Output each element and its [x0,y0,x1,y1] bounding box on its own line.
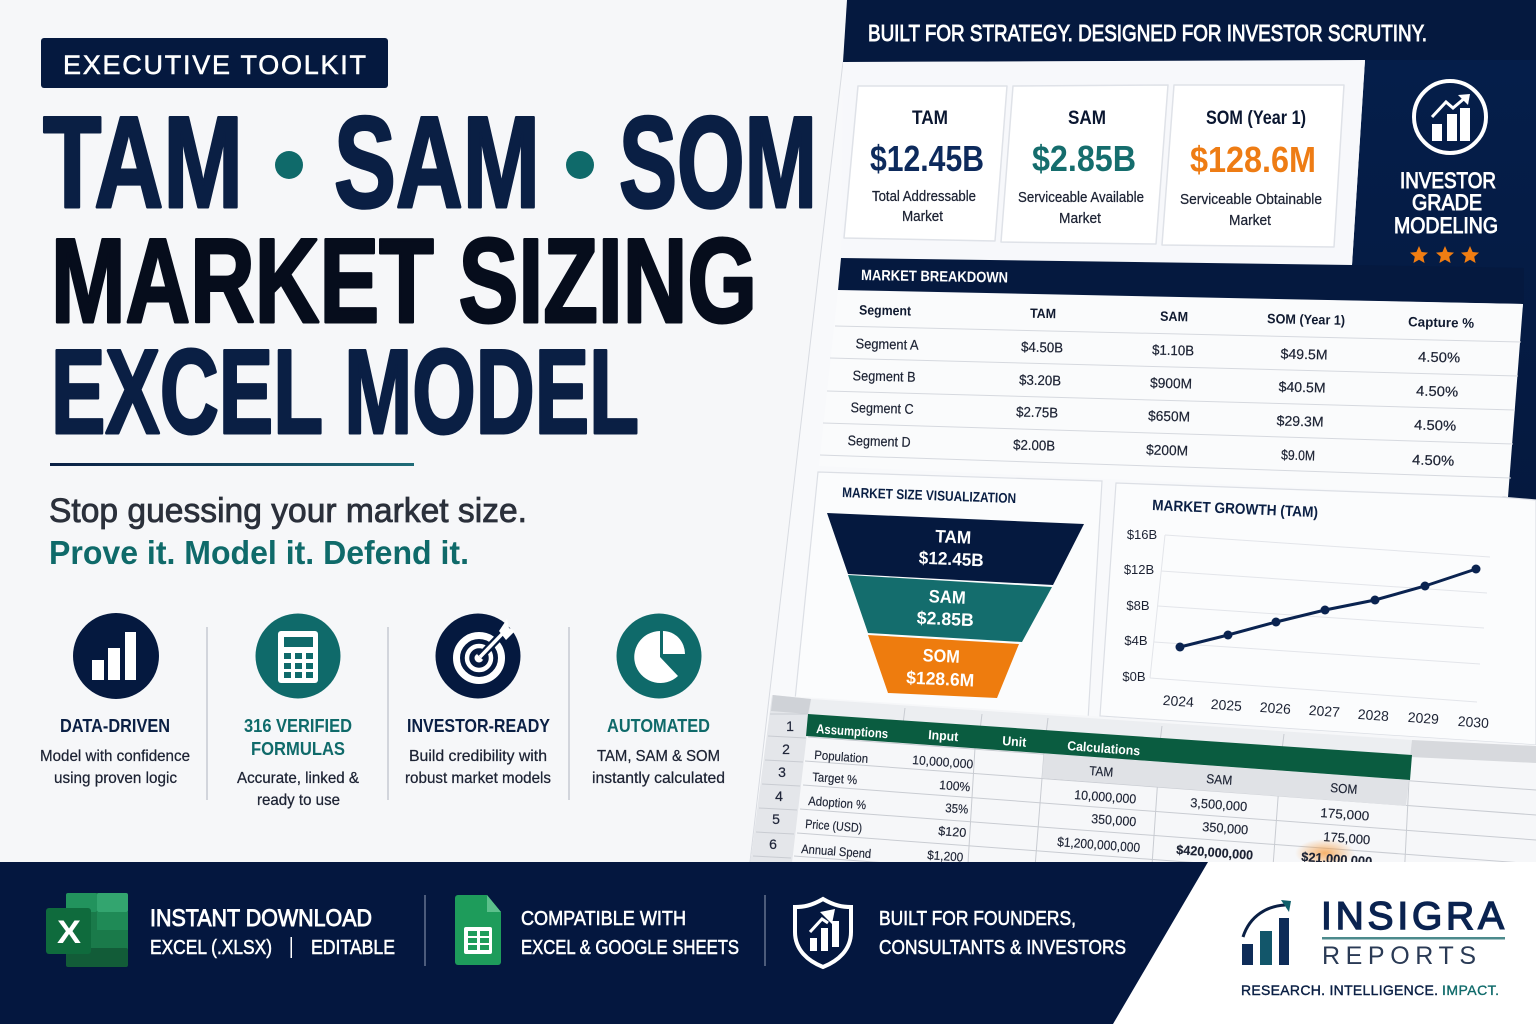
icon: three stars [1410,246,1479,263]
table rows: 4.50% [1418,349,1460,365]
green header band [806,714,1412,780]
icon: bar chart [73,613,159,699]
feature: investor-ready: INVESTOR-READY [407,716,550,736]
y axis labels: $16B [1127,527,1157,542]
text: compatibility [521,908,739,959]
table heading band [838,258,1524,304]
panel: investor badge [1352,60,1536,500]
badge: executive toolkit: EXECUTIVE TOOLKIT [63,50,366,80]
title: SOM [619,89,817,235]
icon: pie chart [616,614,702,698]
assumption rows: 100% [939,778,971,794]
feature: verified formulas: 316 VERIFIED [244,716,352,736]
card: SOM: $128.6M [1190,139,1316,180]
row numbers: 4 [775,788,783,804]
feature: investor-ready [405,614,551,787]
icon: excel [46,893,128,967]
table rows: 4.50% [1412,451,1454,469]
row numbers: 1 [786,718,794,734]
card: SOM [1162,85,1344,247]
spreadsheet [750,695,1536,862]
text: instant download: EXCEL (.XLSX) [150,937,272,959]
assumption rows: Price (USD) [805,817,863,835]
text: audience [879,908,1126,959]
calculation rows: $420,000,000 [1176,842,1254,863]
card: TAM: Total Addressable [872,188,976,205]
funnel chart: $12.45B [918,548,984,570]
panel: market size visualization [795,472,1102,720]
table rows: 4.50% [1416,382,1458,400]
text: audience: BUILT FOR FOUNDERS, [879,908,1076,930]
feature: investor-ready: robust market models [405,770,551,787]
table: market breakdown [819,258,1524,497]
card: TAM: TAM [912,108,948,129]
icon: logo mark [1242,900,1291,965]
text: instant download: INSTANT DOWNLOAD [150,905,372,932]
row numbers: 3 [778,764,786,780]
calculation rows: $1,200,000,000 [1057,834,1141,855]
calculation rows: SOM [1330,780,1358,797]
y axis labels: $4B [1124,633,1148,648]
logo: Insigra Reports: IMPACT. [1442,982,1499,998]
funnel chart: TAM [935,526,972,548]
assumption rows: 35% [945,801,969,817]
card: SAM: $2.85B [1032,138,1136,179]
x axis labels: 2030 [1457,713,1490,731]
x axis labels [1162,692,1490,731]
logo: Insigra Reports: RESEARCH. INTELLIGENCE. [1241,982,1438,998]
table rows: $9.0M [1281,447,1315,464]
panel: dashboard background [750,60,1536,862]
table rows: $49.5M [1280,345,1328,363]
text: instant download: EDITABLE [311,937,395,959]
panel: investor badge: INVESTOR [1400,168,1496,193]
feature: data-driven: DATA-DRIVEN [60,716,170,736]
calculation rows: 3,500,000 [1190,795,1248,814]
assumption rows: $120 [938,824,967,840]
table rows: 4.50% [1414,416,1456,434]
calculation rows: 175,000 [1320,805,1370,824]
icon: excel: X [57,914,82,950]
icon: growth chart [1414,81,1486,153]
x axis labels: 2026 [1259,699,1292,717]
table header row: SOM (Year 1) [1267,311,1345,328]
table rows: $2.75B [1016,403,1058,421]
logo: Insigra Reports: INSIGRA [1321,895,1504,938]
table header row: Capture % [1408,314,1474,331]
funnel chart: $2.85B [916,608,974,630]
row numbers: 5 [772,811,780,827]
calculation rows: 10,000,000 [1074,787,1137,807]
funnel chart: SOM [922,645,960,667]
feature: data-driven: using proven logic [54,770,177,787]
table header row: Segment [859,302,912,319]
tagline: Prove it. Model it. Defend it. [49,534,469,571]
calculation rows [1057,763,1373,869]
assumption rows: Adoption % [808,794,867,812]
table rows: $4.50B [1021,339,1063,355]
title: EXCEL MODEL [51,325,639,459]
feature: verified formulas: Accurate, linked & [237,770,359,787]
table rows: Segment B [852,367,916,385]
card: SAM: Serviceable Available [1018,189,1144,206]
feature: automated: instantly calculated [592,770,725,787]
card: SOM: Market [1229,212,1272,229]
table rows: $3.20B [1019,371,1061,389]
card: TAM: $12.45B [870,138,984,179]
assumption rows: Target % [812,770,858,787]
x axis labels: 2029 [1407,709,1440,727]
table rows: $650M [1148,407,1190,425]
funnel chart [827,513,1084,698]
card: SAM: SAM [1068,108,1106,129]
table header row: TAM [1030,306,1056,321]
table rows: $40.5M [1278,378,1326,396]
y axis labels [1122,527,1157,684]
tagline: Stop guessing your market size. [49,492,527,530]
assumption rows: Annual Spend [801,842,872,861]
calculation rows: TAM [1089,763,1114,780]
card: TAM: Market [902,208,944,225]
panel: KPI area [841,60,1365,265]
logo: Insigra Reports [1241,895,1505,998]
x axis labels: 2027 [1308,702,1341,720]
panel: investor badge: MODELING [1394,213,1498,238]
calculation rows: $21,000,000 [1301,849,1373,869]
header strip [843,0,1536,62]
text: compatibility: COMPATIBLE WITH [521,908,686,930]
title: MARKET SIZING [51,214,757,348]
icon: calculator [256,614,340,698]
row numbers [769,718,794,852]
green header band: Assumptions [816,721,889,741]
funnel chart: SAM [928,586,966,608]
card: TAM [844,86,1007,241]
title: SAM [334,89,540,235]
green header band: Unit [1002,733,1027,750]
card: SOM: SOM (Year 1) [1206,108,1306,129]
y axis labels: $8B [1126,598,1150,613]
feature: data-driven: Model with confidence [40,748,190,765]
row numbers: 6 [769,836,777,852]
bottom band [0,862,1536,1024]
table rows: $200M [1146,441,1188,459]
calculation rows: 175,000 [1323,829,1371,847]
badge: executive toolkit [41,38,388,88]
text: compatibility: EXCEL & GOOGLE SHEETS [521,937,739,959]
table rows: Segment D [847,432,911,450]
feature: automated [592,614,725,787]
growth line [1176,564,1480,652]
row header column [750,695,810,862]
calculation rows: 350,000 [1202,819,1249,837]
table rows: Segment C [850,399,914,417]
card: SAM [1001,85,1168,244]
x axis labels: 2028 [1357,706,1390,724]
icon: target [436,614,520,698]
green header band: Input [928,727,959,744]
icon: google sheets [455,895,501,965]
funnel chart: $128.6M [906,668,975,690]
feature: verified formulas: FORMULAS [251,739,345,759]
table rows: $29.3M [1276,412,1324,430]
assumption rows: $1,200 [927,848,964,865]
calculation rows: 350,000 [1091,811,1137,829]
table rows: $900M [1150,374,1192,392]
feature: verified formulas: ready to use [257,792,340,809]
feature: investor-ready: Build credibility with [409,748,547,765]
title [43,89,817,459]
row numbers: 2 [782,741,790,757]
calculation header cells [1042,754,1409,806]
panel: market growth line chart: MARKET GROWTH (TAM) [1152,497,1318,521]
assumption rows [801,748,974,865]
card: SAM: Market [1059,210,1102,227]
table rows [847,335,1460,469]
panel: market size visualization: MARKET SIZE VISUALIZATION [842,484,1016,506]
header strip: BUILT FOR STRATEGY. DESIGNED FOR INVESTOR SCRUTINY. [868,20,1427,46]
panel: investor badge: GRADE [1412,190,1482,215]
table heading band: MARKET BREAKDOWN [861,267,1008,287]
assumption rows: 10,000,000 [912,753,974,771]
feature: automated: AUTOMATED [607,716,710,736]
y axis labels: $0B [1122,669,1146,684]
assumption rows: Population [814,748,869,766]
feature: verified formulas [237,614,359,809]
logo: Insigra Reports: REPORTS [1322,942,1476,970]
table header row: SAM [1160,309,1188,324]
table rows: $1.10B [1152,342,1194,358]
green header band: Calculations [1067,738,1141,758]
panel: market growth line chart [1100,483,1536,745]
table rows: Segment A [855,335,919,353]
text: audience: CONSULTANTS & INVESTORS [879,937,1126,959]
x axis labels: 2025 [1210,696,1243,714]
feature: data-driven [40,613,190,787]
icon: shield [795,899,851,967]
x axis labels: 2024 [1162,692,1195,710]
table rows: $2.00B [1013,436,1055,454]
tagline [49,492,527,571]
calculation rows: SAM [1206,771,1233,788]
table header row [859,302,1474,331]
card: SOM: Serviceable Obtainable [1180,191,1322,208]
text: instant download [150,905,395,959]
feature: automated: TAM, SAM & SOM [597,748,720,765]
title: TAM [43,89,243,235]
y axis labels: $12B [1124,562,1154,577]
